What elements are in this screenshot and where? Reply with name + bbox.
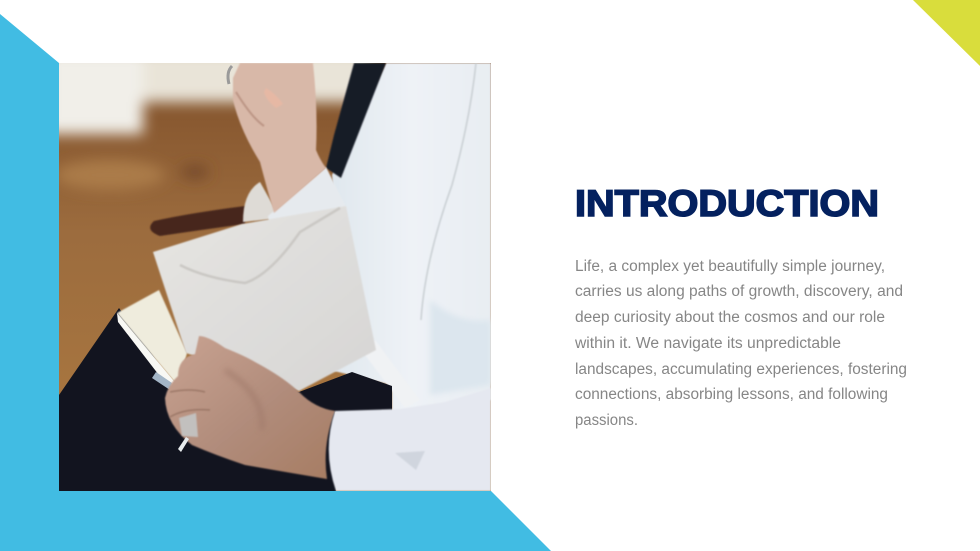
- body paragraph: carries us along paths of growth, discovery, and: [575, 283, 903, 300]
- lower hand: [165, 336, 335, 479]
- photo: hands holding a notebook: [45, 50, 491, 491]
- body paragraph: landscapes, accumulating experiences, fostering: [575, 361, 907, 378]
- body paragraph: connections, absorbing lessons, and following: [575, 386, 888, 403]
- pen: [152, 372, 172, 390]
- notebook cover: [153, 206, 376, 391]
- body paragraph: deep curiosity about the cosmos and our role: [575, 309, 885, 326]
- title: INTRODUCTION: [575, 183, 879, 224]
- blue corner shape: [0, 14, 551, 551]
- body paragraph: passions.: [575, 412, 638, 429]
- cuff: [329, 388, 491, 491]
- yellow corner triangle: [913, 0, 980, 66]
- body paragraph: within it. We navigate its unpredictable: [574, 335, 841, 352]
- raised hand: [233, 63, 326, 213]
- body paragraph: Life, a complex yet beautifully simple journey,: [575, 258, 885, 275]
- black trousers: [59, 308, 392, 491]
- shirt: [330, 63, 491, 412]
- chair arm: [150, 206, 245, 236]
- sleeve: [243, 182, 280, 222]
- notebook pages: [117, 290, 187, 386]
- body paragraph: [574, 258, 907, 429]
- ring: [179, 413, 198, 437]
- black strap: [326, 63, 386, 178]
